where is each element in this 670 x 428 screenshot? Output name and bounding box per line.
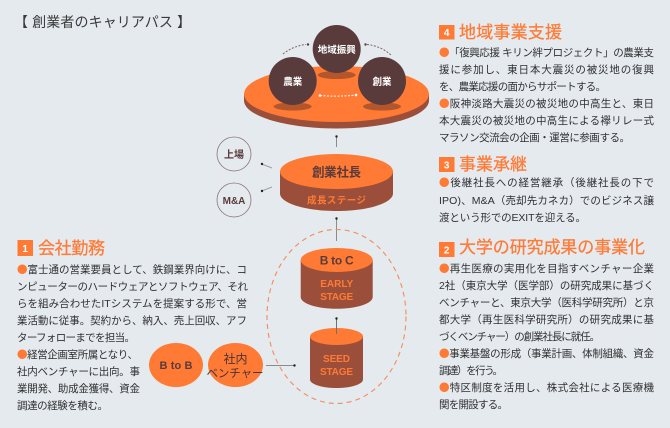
- heading 3: 事業承継: [459, 155, 527, 174]
- body 2: 調達）を行う。: [439, 364, 503, 377]
- cylinder: early stage: B to C: [320, 254, 354, 268]
- section 1: company employment: [17, 239, 248, 412]
- cylinder: early stage: STAGE: [320, 292, 354, 303]
- blob: B to B: B to B: [160, 360, 193, 372]
- diagram: regional platform with three spheres: [244, 25, 429, 128]
- body 1: 業活動に従事。契約から、納入、売上回収、アフ: [17, 314, 247, 327]
- disc: president, growth stage: [280, 154, 393, 211]
- body 2: ベンチャーと、東京大学（医科学研究所）と京: [439, 296, 654, 309]
- title: 【 創業者のキャリアパス 】: [14, 14, 191, 30]
- badge 1: 1: [22, 244, 28, 255]
- body 1: らを組み合わせたITシステムを提案する形で、営: [17, 297, 247, 310]
- body 4: 援に参加し、東日本大震災の被災地の復興: [439, 63, 654, 76]
- arrow: to M&A: [261, 187, 272, 192]
- body 1: ターフォローまでを担当。: [17, 331, 135, 344]
- body 2: 都大学（再生医科学研究所）の研究成果に基: [439, 313, 654, 326]
- arrow: venture to seed stage: [266, 364, 296, 367]
- disc: president, growth stage: 創業社長: [312, 164, 361, 180]
- body 1: ●経営企画室所属となり、: [17, 347, 138, 362]
- cylinder: seed stage: STAGE: [320, 367, 353, 378]
- body 4: 本大震災の被災地の中高生による襷リレー式: [439, 114, 654, 127]
- cylinder: early stage: [301, 248, 373, 309]
- platform disc: [244, 66, 429, 128]
- blob: internal venture: [206, 343, 264, 387]
- sphere: agriculture: 農業: [283, 76, 303, 88]
- sphere: drug discovery: [358, 57, 406, 110]
- blob: internal venture: ベンチャー: [206, 367, 264, 380]
- blob: B to B: [149, 343, 203, 387]
- section 2: commercializing university research: [439, 238, 654, 411]
- sphere: agriculture: [269, 57, 317, 110]
- disc: president, growth stage: 成長ステージ: [307, 194, 366, 206]
- body 2: ●事業基盤の形成（事業計画、体制組織、資金: [439, 346, 654, 361]
- body 4: ●阪神淡路大震災の被災地の中高生と、東日: [439, 96, 654, 111]
- body 4: を、農業応援の面からサポートする。: [439, 80, 606, 93]
- badge 1: [18, 240, 33, 256]
- sphere: drug discovery: 創業: [372, 76, 392, 88]
- body 4: [439, 45, 654, 144]
- arrow: seed to early stage: [335, 317, 338, 334]
- body 2: 関を開設する。: [439, 399, 508, 411]
- arrows between spheres: [283, 43, 391, 97]
- heading 1: 会社勤務: [38, 239, 105, 258]
- arrow: early stage to president: [335, 217, 338, 241]
- body 3: IPO)、M&A（売却先カネカ）でのビジネス譲: [439, 194, 654, 207]
- badge 4: [439, 25, 454, 40]
- body 2: ●再生医療の実用化を目指すベンチャー企業: [439, 261, 654, 276]
- badge: listing: 上場: [224, 148, 244, 161]
- body 3: ●後継社長への経営継承（後継社長の下で: [439, 175, 654, 190]
- body 1: 社内ベンチャーに出向。事: [17, 365, 140, 378]
- body 4: ●「復興応援 キリン絆プロジェクト」の農業支: [439, 45, 654, 60]
- cylinder: seed stage: [310, 328, 363, 388]
- badge: M&A: [217, 183, 251, 217]
- arrow: president to platform: [335, 135, 338, 147]
- body 4: マラソン交流会の企画・運営に参画する。: [439, 131, 630, 144]
- sphere: regional revitalization: 地域振興: [318, 44, 356, 56]
- cylinder: seed stage: SEED: [323, 354, 350, 365]
- body 1: [17, 262, 248, 412]
- body 2: ●特区制度を活用し、株式会社による医療機: [439, 380, 654, 395]
- heading 4: 地域事業支援: [459, 23, 562, 42]
- arrow: to listing: [261, 163, 272, 168]
- body 2: づくベンチャー）の創業社長に就任。: [439, 330, 600, 343]
- badge 4: 4: [444, 28, 450, 39]
- badge: M&A: M&A: [223, 196, 245, 207]
- section 4: regional business support: [439, 23, 654, 144]
- badge 3: 3: [444, 160, 450, 172]
- dashed startup boundary: [267, 230, 406, 404]
- body 2: 2社（東京大学（医学部）の研究成果に基づく: [439, 279, 654, 292]
- section 3: business succession: [439, 155, 654, 224]
- body 3: 渡という形でのEXITを迎える。: [439, 212, 586, 224]
- body 2: [439, 261, 654, 411]
- body 1: 調達の経験を積む。: [17, 399, 108, 412]
- body 1: 業開発、助成金獲得、資金: [17, 382, 140, 395]
- blob: internal venture: 社内: [224, 351, 248, 366]
- badge 2: [439, 242, 454, 257]
- body 3: [439, 175, 654, 224]
- body 1: ンピューターのハードウェアとソフトウェア、それ: [17, 281, 248, 293]
- sphere: regional revitalization: [313, 25, 361, 79]
- badge: listing: [217, 137, 251, 171]
- badge 3: [439, 157, 454, 172]
- body 1: ●富士通の営業要員として、鉄鋼業界向けに、コ: [17, 262, 247, 277]
- badge 2: 2: [444, 246, 450, 256]
- cylinder: early stage: EARLY: [320, 279, 354, 290]
- heading 2: 大学の研究成果の事業化: [459, 238, 645, 257]
